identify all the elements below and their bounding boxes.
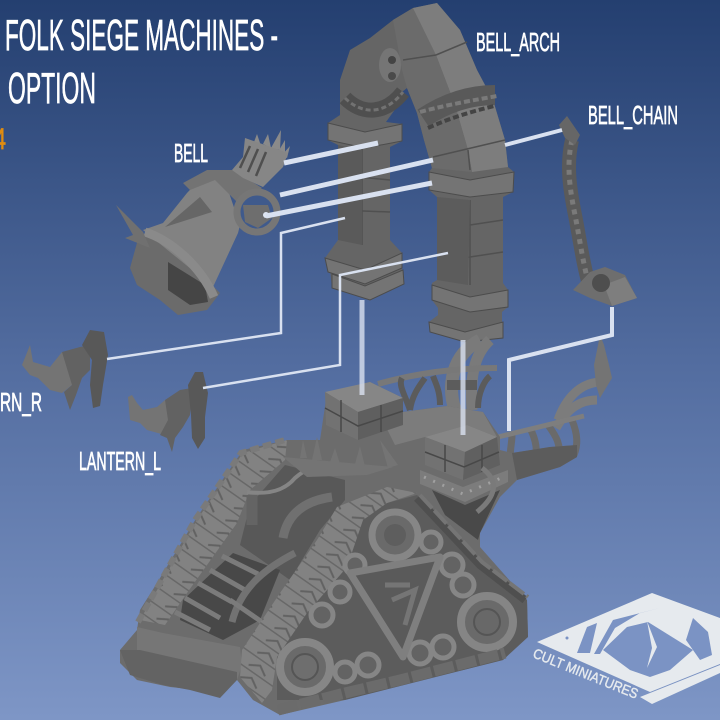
arch light face [412, 3, 508, 172]
logo wordmark: CULT MINIATURES [531, 645, 641, 702]
bell body [143, 172, 240, 287]
logo lower stripe [640, 665, 720, 704]
lantern r bracket [82, 330, 108, 408]
left pillar face [338, 145, 362, 245]
rear rail [378, 368, 497, 384]
label: bell arch: BELL_ARCH [476, 27, 560, 57]
chain link strand [569, 140, 590, 288]
pipe collar [447, 380, 477, 390]
left track serration [138, 440, 285, 622]
arch silhouette [325, 3, 514, 342]
label: lantern r: RN_R [0, 387, 42, 417]
spiked turret band [283, 437, 398, 477]
left track [140, 440, 287, 625]
title: FOLK SIEGE MACHINES - [5, 11, 278, 60]
wheel [237, 192, 277, 232]
triangle plate [350, 557, 440, 657]
deck pipes [452, 340, 490, 410]
part: bell chain [559, 116, 637, 306]
diagonal track edge [417, 498, 525, 600]
bell flame mass [130, 232, 220, 315]
skull detail [379, 48, 401, 82]
arch block joints [338, 42, 505, 285]
arch inner face [393, 8, 472, 172]
logo left dot [566, 636, 568, 640]
chain top block [559, 116, 580, 145]
logo eye [603, 622, 693, 677]
title: OPTION [8, 64, 96, 113]
crown ribs [240, 146, 266, 176]
side armour panel [277, 495, 528, 700]
engine recess [240, 465, 345, 580]
lantern r body [62, 345, 90, 410]
logo diamond [537, 593, 720, 692]
logo: cult miniatures [531, 593, 720, 704]
bell mouth dark [168, 262, 208, 305]
hull silhouette [120, 382, 577, 715]
logo eye fang [647, 621, 657, 668]
lower hoop pipe [477, 468, 493, 512]
bell rim [145, 232, 214, 297]
connector lines [107, 130, 612, 435]
lantern l flame [128, 395, 172, 435]
part: bell arch [325, 3, 514, 342]
undercarriage gap [432, 490, 500, 540]
logo arc [594, 608, 660, 654]
bell crown [232, 138, 288, 187]
small wheels [311, 532, 474, 682]
engine pipes [247, 463, 335, 538]
lantern r flame [22, 345, 72, 393]
part: lantern l [128, 372, 208, 452]
right pillar shaded face [437, 197, 470, 285]
right rail arches [510, 420, 577, 470]
winch [573, 267, 637, 306]
prow upper band [137, 627, 242, 680]
prow plates [120, 650, 237, 698]
capitals [325, 123, 514, 342]
right rail [498, 416, 584, 437]
lantern l bracket [188, 372, 208, 449]
chain wrap on arch [345, 92, 497, 128]
right flame [594, 335, 612, 398]
deck top [385, 406, 497, 445]
left tower [325, 382, 403, 440]
bottom track segments [278, 653, 505, 710]
part: tank hull [120, 335, 612, 715]
right tower [425, 425, 500, 480]
logo right mark [686, 618, 712, 660]
spike left [116, 205, 150, 248]
bell shoulder band [183, 170, 262, 205]
right pipes [556, 382, 600, 428]
lantern l body [160, 388, 192, 452]
label: bell: BELL [174, 138, 208, 168]
part: bell [116, 130, 290, 315]
bell spikes top [254, 130, 290, 158]
rear rail arches [401, 376, 490, 410]
hatch opening with slats [180, 553, 280, 640]
title [5, 11, 278, 113]
logo left crescent [577, 623, 597, 653]
part: lantern r [22, 330, 108, 410]
bell emblem [165, 197, 212, 227]
label: lantern l: LANTERN_L [79, 446, 161, 476]
diagonal track plates [420, 495, 528, 597]
skirt rivets band [420, 470, 508, 502]
front track [240, 487, 417, 703]
right lower deck band [512, 445, 577, 480]
large wheels [280, 512, 513, 692]
